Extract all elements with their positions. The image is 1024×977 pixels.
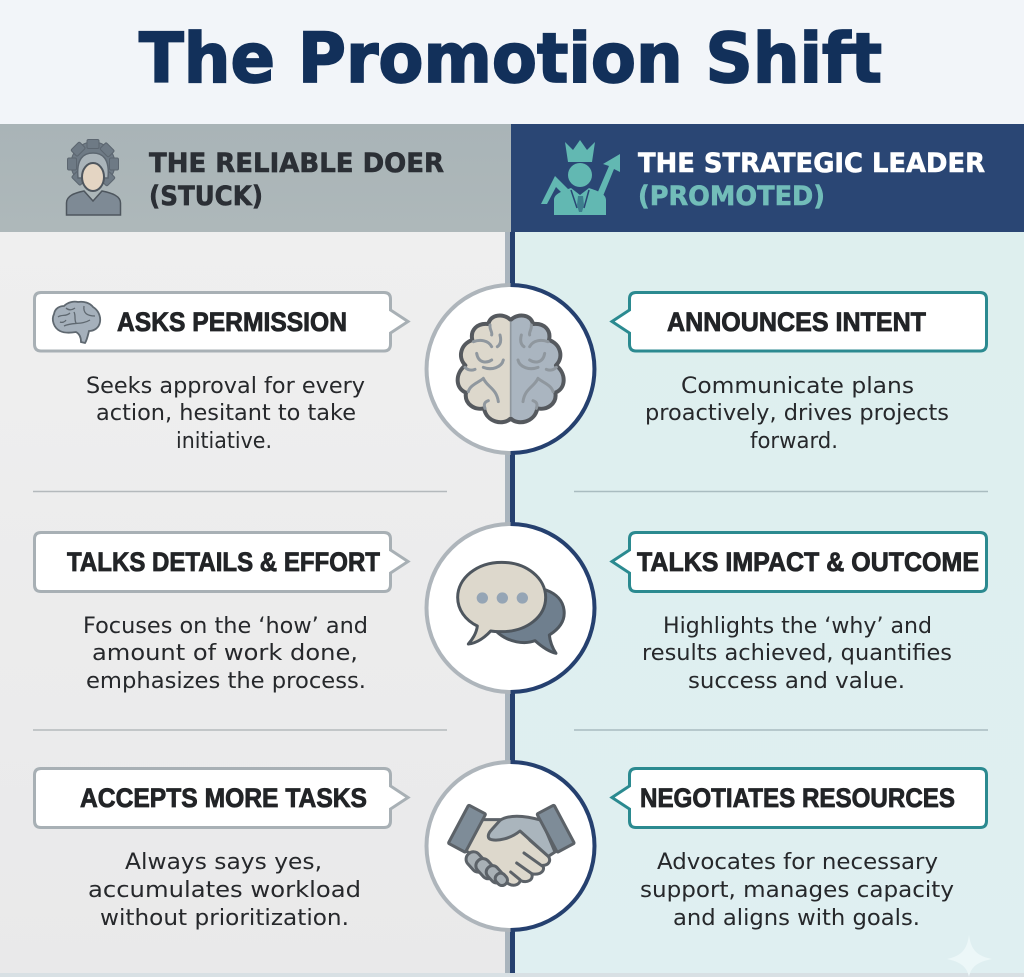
- text: negotiates resources description: support, manages capacity: [640, 878, 954, 903]
- callout label: ANNOUNCES INTENT: [667, 307, 926, 337]
- panel: reliable doer background: [0, 232, 508, 977]
- header text: the strategic leader: THE STRATEGIC LEADER: [638, 148, 985, 179]
- panel: strategic leader background: [512, 232, 1024, 977]
- callout label: TALKS IMPACT & OUTCOME: [637, 547, 979, 577]
- icon: crowned leader with arrow: [541, 140, 620, 215]
- text: talks details description: [83, 614, 368, 694]
- text: talks impact description: results achieved, quantifies: [642, 641, 952, 666]
- header text: stuck: (STUCK): [149, 181, 263, 212]
- callout: announces intent: [612, 292, 986, 351]
- text: talks impact description: success and value.: [688, 669, 905, 694]
- callout: negotiates resources: [612, 768, 986, 828]
- icon: center handshake medallion: [426, 762, 594, 930]
- title: The Promotion Shift: [139, 19, 882, 99]
- callout: accepts more tasks: [34, 768, 408, 828]
- text: asks permission description: [86, 374, 365, 454]
- text: talks impact description: Highlights the ‘why’ and: [663, 614, 932, 639]
- callout label: NEGOTIATES RESOURCES: [640, 783, 955, 813]
- text: asks permission description: initiative.: [176, 429, 272, 454]
- text: negotiates resources description: Advocates for necessary: [657, 850, 938, 875]
- title band: [0, 0, 1024, 124]
- icon: center speech bubbles medallion: [426, 524, 594, 692]
- callout label: ACCEPTS MORE TASKS: [80, 783, 367, 813]
- header: reliable doer: [0, 124, 511, 232]
- text: talks details description: Focuses on the ‘how’ and: [83, 614, 368, 639]
- text: accepts more tasks description: Always says yes,: [125, 850, 322, 875]
- text: negotiates resources description: [640, 850, 954, 931]
- callout: talks details and effort: [34, 532, 408, 592]
- decorative sparkle: [947, 935, 992, 977]
- row dividers: [33, 492, 988, 730]
- callout: talks impact and outcome: [612, 532, 986, 592]
- icon: center brain medallion: [426, 285, 594, 453]
- text: talks impact description: [642, 614, 952, 694]
- text: asks permission description: action, hesitant to take: [96, 401, 356, 426]
- icon: small brain: [53, 302, 100, 343]
- text: accepts more tasks description: accumulates workload: [88, 878, 361, 903]
- text: talks details description: amount of work done,: [92, 641, 358, 666]
- text: announces intent description: Communicate plans: [681, 374, 914, 399]
- text: talks details description: emphasizes the process.: [86, 669, 366, 694]
- text: accepts more tasks description: without prioritization.: [100, 906, 349, 931]
- callout: asks permission: [34, 292, 408, 351]
- text: accepts more tasks description: [88, 850, 361, 931]
- text: negotiates resources description: and aligns with goals.: [673, 906, 920, 931]
- text: asks permission description: Seeks approval for every: [86, 374, 365, 399]
- text: announces intent description: forward.: [750, 429, 838, 454]
- header text: the reliable doer: THE RELIABLE DOER: [149, 148, 444, 179]
- text: announces intent description: [645, 374, 949, 454]
- callout label: ASKS PERMISSION: [117, 307, 347, 337]
- header text: promoted: (PROMOTED): [638, 181, 825, 212]
- text: announces intent description: proactively, drives projects: [645, 401, 949, 426]
- icon: gear person: [58, 129, 128, 215]
- header: strategic leader: [511, 124, 1024, 232]
- callout label: TALKS DETAILS & EFFORT: [67, 547, 380, 577]
